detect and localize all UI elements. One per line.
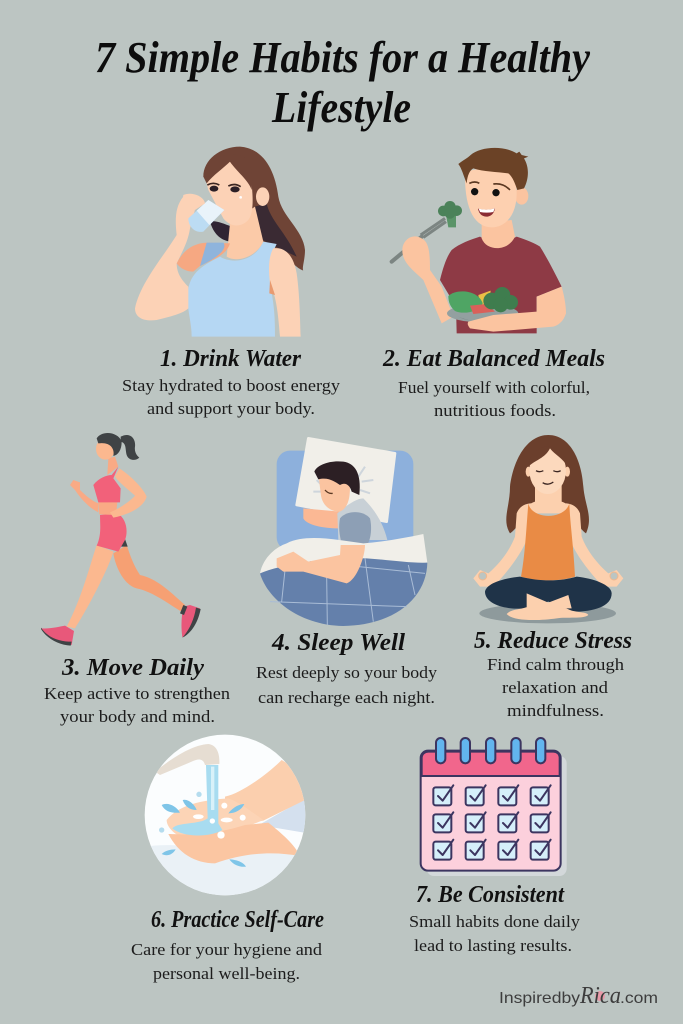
icon: hands washing under faucet	[145, 735, 308, 903]
description	[256, 663, 438, 707]
icon: man sleeping in bed	[260, 438, 427, 626]
heading: 4. Sleep Well	[271, 630, 405, 656]
logo: InspiredbyRica.com: .com	[620, 990, 658, 1007]
heading: 1. Drink Water	[160, 346, 302, 372]
panel: reduce stress	[473, 435, 632, 720]
description: mindfulness.	[507, 701, 604, 720]
description: Fuel yourself with colorful,	[398, 378, 590, 397]
icon: woman running	[41, 433, 201, 646]
description: your body and mind.	[60, 707, 215, 726]
description: lead to lasting results.	[414, 936, 572, 955]
title: 7 Simple Habits for a Healthy	[95, 33, 590, 82]
description	[409, 912, 581, 955]
icon: man eating salad	[392, 148, 566, 333]
heading: 5. Reduce Stress	[474, 628, 632, 654]
icon: calendar with checkmarks	[421, 738, 567, 876]
description: can recharge each night.	[258, 688, 435, 707]
icon: woman drinking water	[135, 147, 305, 337]
description	[44, 684, 231, 726]
logo: InspiredbyRica.com	[499, 983, 658, 1009]
title	[95, 33, 590, 132]
panel: self-care	[131, 735, 324, 983]
description: and support your body.	[147, 399, 315, 418]
description: Stay hydrated to boost energy	[122, 376, 341, 395]
description	[487, 655, 625, 720]
title: Lifestyle	[271, 83, 411, 132]
panel: drink water	[122, 147, 341, 418]
description: Find calm through	[487, 655, 625, 674]
description: Keep active to strengthen	[44, 684, 231, 703]
heading: 7. Be Consistent	[416, 882, 565, 908]
description: Care for your hygiene and	[131, 940, 323, 959]
description	[131, 940, 323, 983]
heading: 6. Practice Self-Care	[151, 907, 324, 933]
panel: sleep well	[256, 438, 438, 707]
panel: move daily	[41, 433, 231, 726]
description: Rest deeply so your body	[256, 663, 438, 682]
description	[122, 376, 341, 418]
description: relaxation and	[502, 678, 609, 697]
heading: 2. Eat Balanced Meals	[382, 346, 605, 372]
description	[398, 378, 590, 420]
heading: 3. Move Daily	[61, 655, 204, 681]
icon: woman meditating	[473, 435, 623, 623]
panel: be consistent	[409, 738, 581, 955]
logo: InspiredbyRica.com: Rica	[579, 983, 621, 1009]
panel: balanced meals	[382, 148, 605, 420]
logo: InspiredbyRica.com: Inspiredby	[499, 990, 580, 1007]
description: nutritious foods.	[434, 401, 556, 420]
description: Small habits done daily	[409, 912, 581, 931]
description: personal well-being.	[153, 964, 300, 983]
